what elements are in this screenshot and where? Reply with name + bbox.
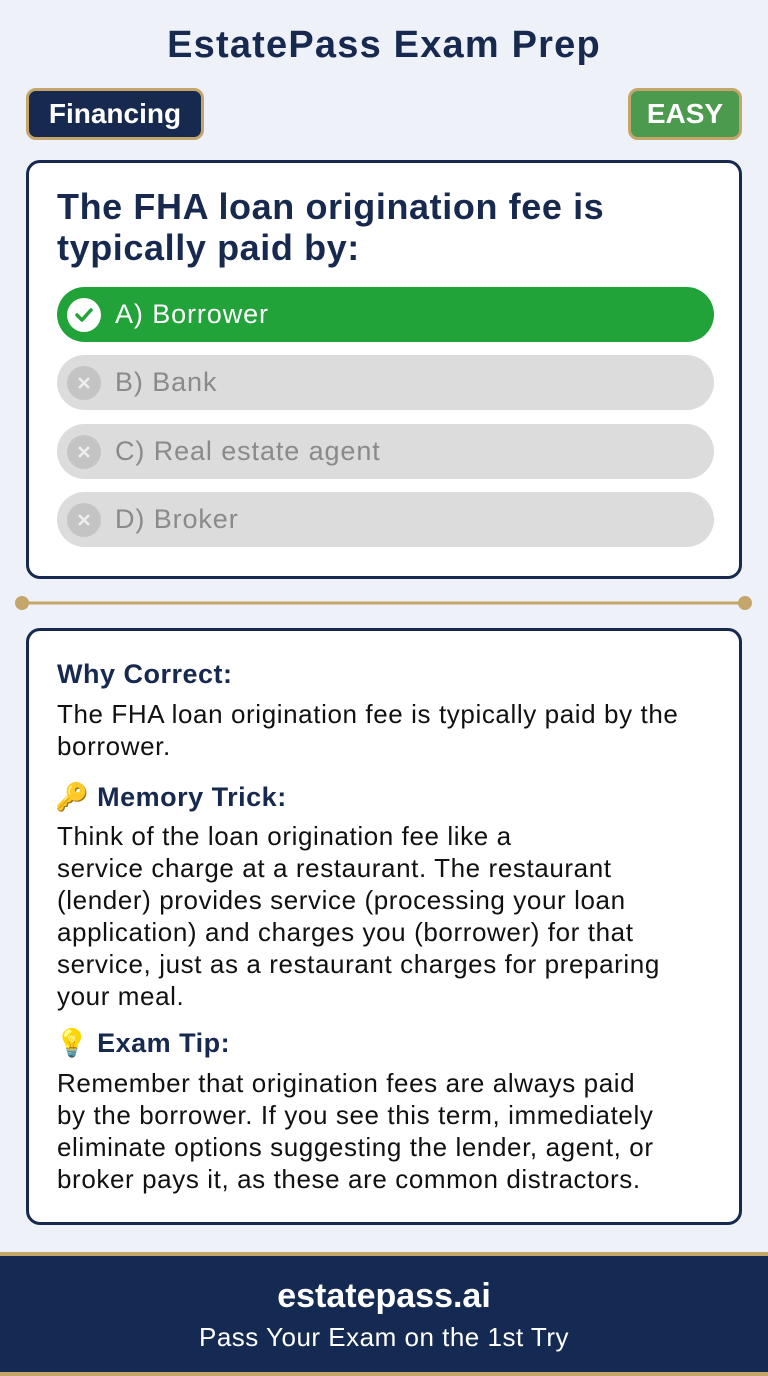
title: EstatePass Exam Prep	[167, 24, 601, 66]
text: memory trick: (lender) provides service (processing your loan	[57, 885, 626, 915]
footer brand: estatepass.ai	[277, 1277, 491, 1315]
badge: category	[26, 88, 204, 140]
option B	[57, 355, 714, 410]
text: exam tip: broker pays it, as these are common distractors.	[57, 1164, 641, 1194]
badge: category: Financing	[49, 98, 181, 129]
badge: difficulty	[628, 88, 742, 140]
option D: D) Broker	[115, 504, 239, 534]
panel: question	[26, 160, 742, 579]
heading: exam tip: 💡 Exam Tip:	[55, 1028, 230, 1058]
heading: why correct: Why Correct:	[57, 659, 233, 689]
question text: The FHA loan origination fee is	[57, 186, 604, 227]
option C	[57, 424, 714, 479]
question text: typically paid by:	[57, 227, 360, 268]
text: memory trick	[57, 821, 660, 1011]
heading: memory trick: 🔑 Memory Trick:	[55, 782, 287, 812]
option D	[57, 492, 714, 547]
text: why correct: borrower.	[57, 731, 171, 761]
text: exam tip: eliminate options suggesting the lender, agent, or	[57, 1132, 654, 1162]
badge: difficulty: EASY	[647, 98, 723, 129]
text: exam tip: Remember that origination fees are always paid	[57, 1068, 635, 1098]
text: memory trick: service charge at a restaurant. The restaurant	[57, 853, 612, 883]
option B: B) Bank	[115, 367, 217, 397]
text: exam tip	[57, 1068, 654, 1194]
footer tagline: Pass Your Exam on the 1st Try	[199, 1322, 569, 1352]
text: memory trick: application) and charges you (borrower) for that	[57, 917, 634, 947]
text: memory trick: Think of the loan origination fee like a	[57, 821, 512, 851]
option C: C) Real estate agent	[115, 436, 381, 466]
option A correct	[57, 287, 714, 342]
option A correct: A) Borrower	[115, 299, 269, 329]
question text	[57, 186, 604, 268]
divider	[15, 596, 752, 610]
panel: explanation	[26, 628, 742, 1225]
footer	[0, 1252, 768, 1376]
text: memory trick: service, just as a restaurant charges for preparing	[57, 949, 660, 979]
text: why correct: The FHA loan origination fee is typically paid by the	[57, 699, 678, 729]
text: why correct	[57, 699, 678, 761]
text: exam tip: by the borrower. If you see this term, immediately	[57, 1100, 653, 1130]
text: memory trick: your meal.	[57, 981, 184, 1011]
